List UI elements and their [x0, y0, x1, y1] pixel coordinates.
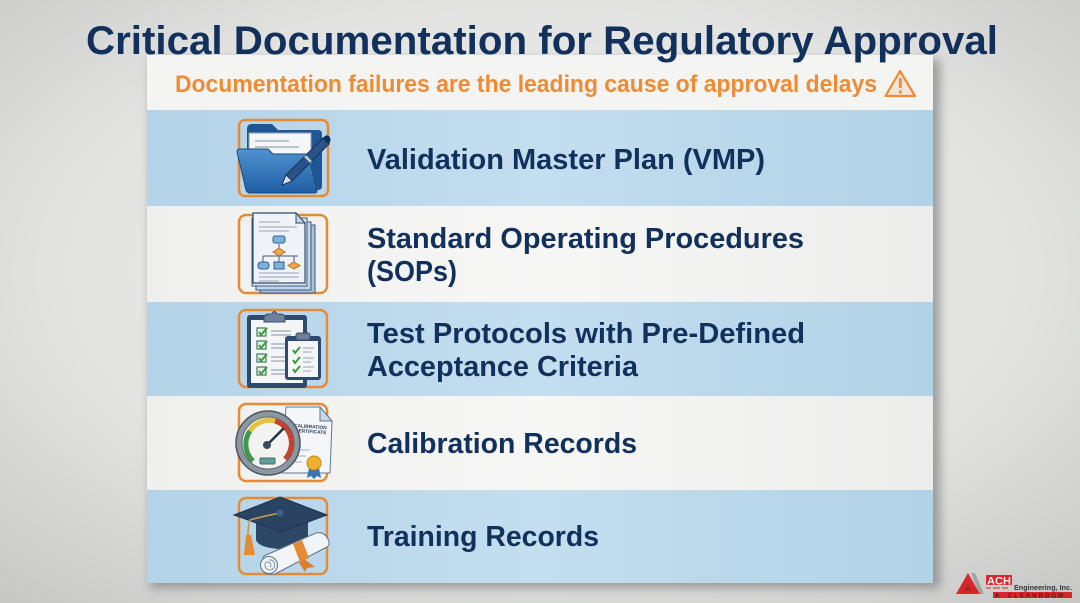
item: Test Protocols: Acceptance Criteria [367, 351, 639, 383]
icon: gauge and calibration certificate: CERTIFICATE [295, 428, 327, 436]
panel: document list [147, 55, 940, 588]
logo: ACH Engineering: A [995, 594, 1000, 600]
icon: gauge and calibration certificate [236, 404, 332, 481]
item: Validation Master Plan: Validation Master Plan (VMP) [367, 144, 765, 176]
title: Critical Documentation for Regulatory Approval [86, 19, 998, 63]
logo: ACH Engineering: CLEANROOM [1008, 594, 1063, 600]
item: Standard Operating Procedures: Standard Operating Procedures [367, 223, 804, 255]
pen [282, 135, 330, 185]
logo: ACH Engineering [956, 573, 1072, 600]
item: Standard Operating Procedures: (SOPs) [367, 256, 457, 288]
icon: warning triangle [886, 71, 915, 96]
logo: ACH Engineering: Engineering, Inc. [1014, 585, 1072, 592]
icon: graduation cap and diploma [234, 497, 329, 574]
subtitle warning: Documentation failures are the leading cause of approval delays [175, 71, 877, 98]
certificate label: CALIBRATION [294, 423, 327, 431]
row 5 background [147, 490, 933, 583]
icon: SOP document stack [239, 213, 327, 293]
item: Calibration Records: Calibration Records [367, 428, 637, 460]
row 3 background [147, 302, 933, 396]
row 4 background [147, 396, 933, 490]
item: Training Records: Training Records [367, 521, 599, 553]
logo: ACH Engineering: ACH [987, 576, 1011, 588]
row 1 background [147, 110, 933, 206]
row 2 background [147, 206, 933, 302]
icon: clipboards checklist [239, 310, 327, 388]
item: Test Protocols: Test Protocols with Pre-Defined [367, 318, 805, 350]
icon: folder and pen [237, 120, 330, 196]
